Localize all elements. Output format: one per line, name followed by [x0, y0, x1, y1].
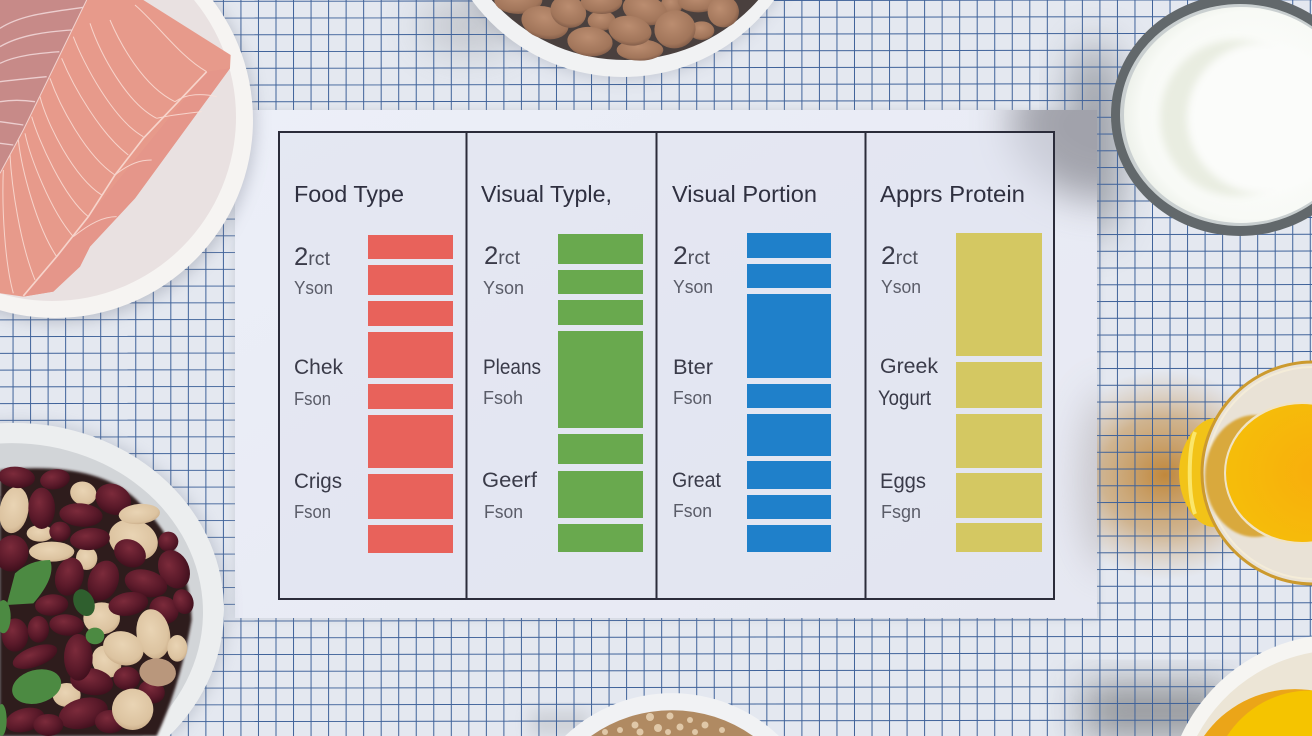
column: Food Type: Fson [294, 502, 331, 522]
egg yolk [1204, 689, 1312, 736]
column: Apprs Protein: Yson [881, 277, 921, 297]
column: Visual Portion: Bter [673, 356, 713, 379]
column: Food Type: Fson [294, 389, 331, 409]
yogurt bowl [1111, 0, 1312, 236]
column: Visual Typle: Visual Typle, [481, 181, 612, 207]
column: Apprs Protein [878, 181, 1042, 552]
column: Visual Typle [481, 181, 643, 552]
column: Food Type: Chek [294, 356, 343, 379]
column: Visual Portion: Fson [673, 388, 712, 408]
kidney and white beans [0, 465, 197, 736]
juice glass [1179, 362, 1312, 584]
column: Apprs Protein: Yogurt [878, 387, 931, 410]
column: Food Type: Crigs [294, 470, 342, 493]
salmon plate [0, 0, 255, 322]
salmon fillet [0, 0, 231, 297]
column: Visual Typle: Geerf [482, 469, 537, 492]
column: Food Type: Food Type [294, 181, 404, 207]
paper sheet [232, 108, 1100, 621]
column: Apprs Protein: 2rct [881, 242, 919, 270]
juice surface [1224, 402, 1312, 544]
beans bowl [0, 423, 227, 736]
column: Visual Typle: Fson [484, 502, 523, 522]
column: Visual Portion: Yson [673, 277, 713, 297]
glass ring [1205, 415, 1305, 537]
column: Food Type: Yson [294, 278, 333, 298]
column: Visual Portion: 2rct [673, 242, 711, 270]
column: Apprs Protein: Eggs [880, 470, 926, 493]
egg bowl [1181, 634, 1312, 736]
column: Visual Typle: Pleans [483, 356, 541, 379]
column: Visual Typle: 2rct [484, 242, 521, 270]
column: Visual Portion: Fson [673, 501, 712, 521]
column: Visual Typle: Fsoh [483, 388, 523, 408]
granola bowl [565, 693, 779, 736]
column: Apprs Protein: Fsgn [881, 502, 921, 522]
chart table [279, 132, 1054, 599]
column: Apprs Protein: Greek [880, 355, 939, 378]
column: Visual Portion: Visual Portion [672, 181, 817, 207]
column: Visual Portion [672, 181, 831, 552]
column: Food Type [294, 181, 453, 553]
yogurt swirl [1160, 40, 1310, 196]
column: Visual Typle: Yson [483, 278, 524, 298]
column: Apprs Protein: Apprs Protein [880, 181, 1025, 207]
column: Food Type: 2rct [294, 243, 331, 271]
column: Visual Portion: Great [672, 469, 721, 492]
granola texture [602, 712, 725, 736]
almonds [494, 0, 745, 61]
almonds bowl [436, 0, 810, 79]
